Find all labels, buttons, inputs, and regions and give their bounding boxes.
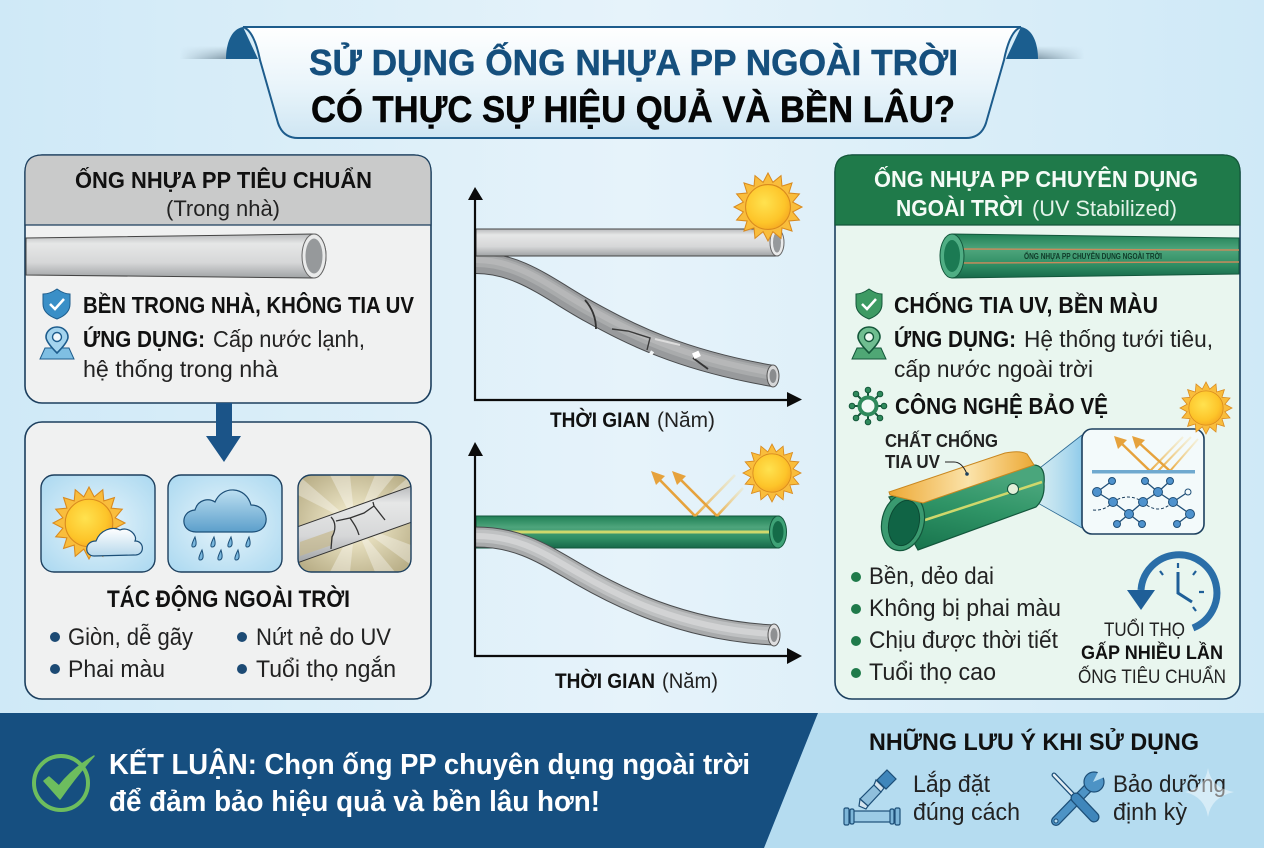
install text: Lắp đặt (913, 771, 990, 798)
banner plate (243, 27, 1021, 138)
install text (913, 771, 1020, 826)
header title: ỐNG NHỰA PP CHUYÊN DỤNG (874, 165, 1198, 192)
axis label: THỜI GIAN (555, 669, 655, 693)
conclusion background (0, 713, 818, 848)
list of benefits (851, 563, 1061, 686)
list of benefits: Tuổi thọ cao (869, 659, 996, 686)
icon: location pin (40, 327, 74, 359)
icon: protection technology (849, 387, 887, 425)
title line 1: SỬ DỤNG ỐNG NHỰA PP NGOÀI TRỜI (309, 41, 958, 83)
axis label: (Năm) (657, 409, 715, 432)
panel header (25, 155, 431, 225)
list of benefits: Không bị phai màu (869, 595, 1061, 622)
maintenance text (1113, 771, 1226, 826)
stable pipe (476, 229, 784, 256)
icon: sun (734, 173, 802, 241)
lifespan text: ỐNG TIÊU CHUẨN (1078, 666, 1226, 688)
icon: green location pin (852, 327, 886, 359)
panel body (835, 155, 1240, 699)
icon: pipe installation (844, 770, 900, 825)
list of effects: Nứt nẻ do UV (256, 624, 391, 651)
application text: cấp nước ngoài trời (894, 356, 1093, 382)
icon: shield (43, 289, 70, 319)
application text: Hệ thống tưới tiêu, (1024, 326, 1213, 352)
title line 2: CÓ THỰC SỰ HIỆU QUẢ VÀ BỀN LÂU? (311, 88, 955, 130)
UV agent label: CHẤT CHỐNG (885, 430, 998, 451)
lifespan text (1078, 619, 1226, 688)
icon: tools (1054, 770, 1107, 823)
panel: standard PP pipe (25, 155, 431, 403)
header subtitle (896, 194, 1177, 221)
lifespan text: TUỔI THỌ (1104, 619, 1185, 641)
install text: đúng cách (913, 799, 1020, 826)
conclusion text: để đảm bảo hiệu quả và bền lâu hơn! (109, 786, 600, 818)
tile: cracked pipe (297, 475, 412, 572)
axis label (550, 408, 715, 432)
banner ribbon tails (226, 27, 1038, 59)
banner side shadows (180, 46, 1084, 59)
header subtitle: (UV Stabilized) (1032, 196, 1177, 221)
sparkle mark (1185, 768, 1234, 817)
icon: sun (1180, 382, 1232, 434)
list of effects: Giòn, dễ gãy (68, 624, 193, 651)
arrow: down to outdoor effects (206, 403, 241, 462)
lifespan text: GẤP NHIỀU LẦN (1081, 642, 1223, 664)
list of effects (50, 624, 396, 683)
list of benefits: Chịu được thời tiết (869, 627, 1058, 654)
application text: hệ thống trong nhà (83, 356, 278, 382)
UV resistance text: CHỐNG TIA UV, BỀN MÀU (894, 291, 1158, 318)
list of benefits: Bền, dẻo dai (869, 563, 994, 590)
panel: outdoor UV stabilised PP pipe (835, 155, 1240, 699)
heading: outdoor effects: TÁC ĐỘNG NGOÀI TRỜI (107, 585, 350, 613)
notes heading: NHỮNG LƯU Ý KHI SỬ DỤNG (869, 727, 1199, 756)
reflected UV arrows (651, 471, 743, 516)
application text (83, 325, 365, 382)
standard pipe image (26, 234, 326, 278)
axis label: THỜI GIAN (550, 408, 650, 432)
chart: UV stabilised pipe over time (468, 442, 802, 693)
tile: sun and cloud (41, 475, 155, 572)
application text: ỨNG DỤNG: (894, 325, 1016, 352)
maintenance text: định kỳ (1113, 799, 1187, 826)
icon: clock with back arrow (1127, 555, 1217, 628)
list of effects: Phai màu (68, 656, 165, 683)
application text: Cấp nước lạnh, (213, 326, 365, 352)
application text: ỨNG DỤNG: (83, 325, 205, 352)
durability text: BỀN TRONG NHÀ, KHÔNG TIA UV (83, 291, 415, 318)
header title: ỐNG NHỰA PP TIÊU CHUẨN (75, 166, 372, 193)
title banner (180, 27, 1084, 138)
header subtitle: NGOÀI TRỜI (896, 194, 1023, 221)
chart: standard pipe over time (468, 173, 802, 432)
maintenance text: Bảo dưỡng (1113, 771, 1226, 798)
inset: molecular detail (1082, 429, 1204, 534)
conclusion text (109, 747, 750, 818)
axes (468, 442, 802, 664)
UV agent label: TIA UV (885, 452, 940, 472)
icon: green shield (856, 289, 882, 319)
UV agent label (885, 430, 998, 476)
axis label: (Năm) (662, 670, 718, 693)
green pipe (476, 516, 786, 548)
notes background (700, 713, 1264, 848)
axes (468, 187, 802, 407)
3D pipe cross-section (876, 452, 1044, 555)
green pipe image: ỐNG NHỰA PP CHUYÊN DỤNG NGOÀI TRỜI (1024, 251, 1162, 261)
magnification cone (1013, 435, 1082, 528)
bottom band (0, 713, 1264, 848)
axis label (555, 669, 718, 693)
tile: rain cloud (168, 475, 282, 572)
panel: outdoor effects (25, 403, 431, 699)
green pipe image (940, 234, 1239, 278)
panel body (25, 422, 431, 699)
degrading pipe curve (476, 260, 779, 387)
application text (894, 325, 1213, 382)
panel header (835, 155, 1240, 225)
heading: protection technology: CÔNG NGHỆ BẢO VỆ (895, 391, 1108, 419)
conclusion text: KẾT LUẬN: Chọn ống PP chuyên dụng ngoài trời (109, 747, 750, 781)
degrading grey pipe (476, 536, 780, 646)
icon: green check circle (34, 756, 94, 810)
panel body (25, 155, 431, 403)
icon: sun (743, 444, 801, 502)
header subtitle: (Trong nhà) (166, 196, 280, 221)
list of effects: Tuổi thọ ngắn (256, 656, 396, 683)
